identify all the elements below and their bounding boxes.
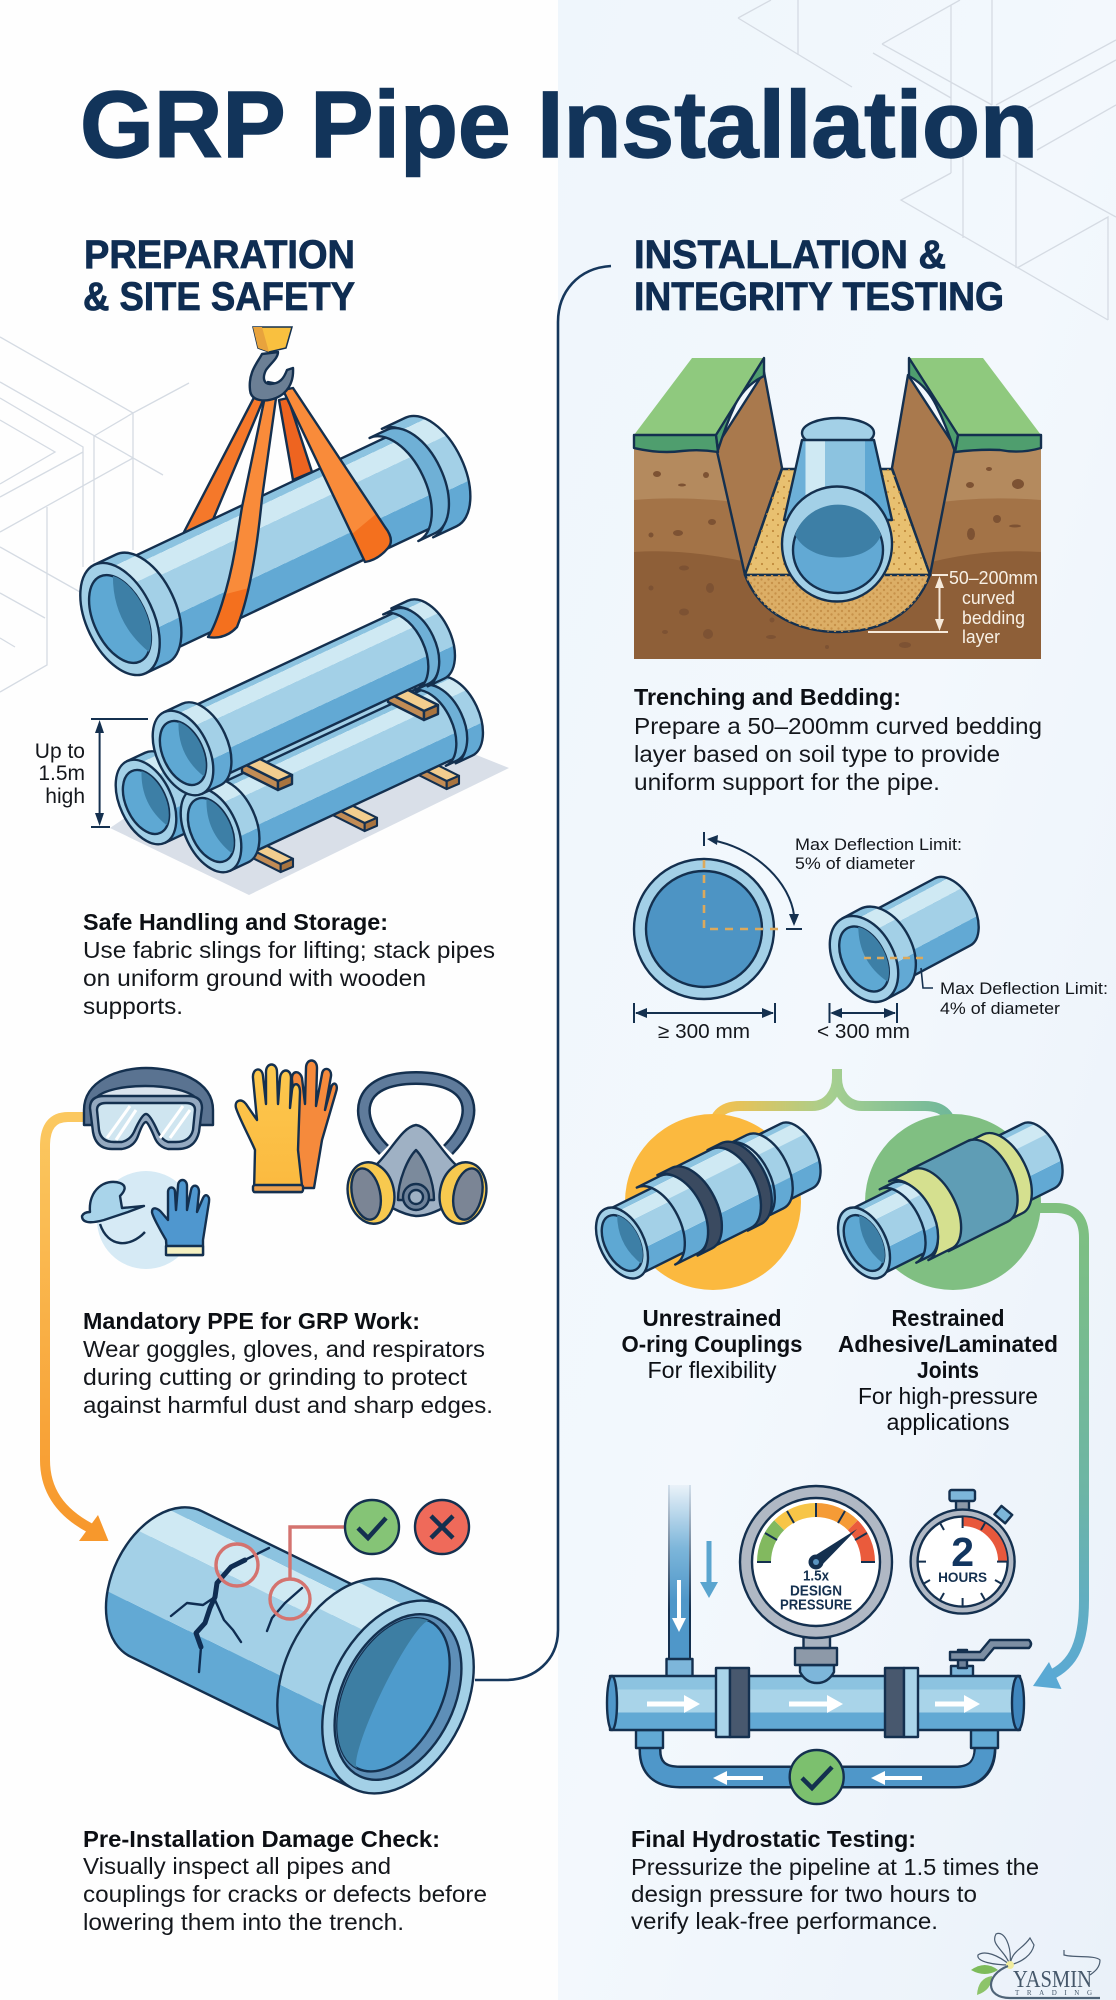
text: pre-installation damage check: Pre-Installation Damage Check: <box>83 1826 440 1852</box>
illustration: trench cross-section with bedding <box>634 358 1041 659</box>
background: left panel <box>0 0 558 2000</box>
height dimension: up to 1.5m high: high <box>45 785 85 808</box>
text: final hydrostatic testing: Pressurize the pipeline at 1.5 times the <box>631 1854 1039 1880</box>
icon: green check <box>345 1500 399 1554</box>
main pipe <box>607 1668 1024 1737</box>
soil specks <box>648 467 1024 649</box>
heading: preparation and site safety: & SITE SAFETY <box>83 275 355 319</box>
bedding depth dimension: bedding <box>962 608 1025 628</box>
bedding depth dimension <box>868 568 1038 647</box>
height dimension: up to 1.5m high: 1.5m <box>38 762 85 785</box>
height dimension: up to 1.5m high: Up to <box>35 740 85 763</box>
text: restrained adhesive laminated joints: Joints <box>917 1357 979 1383</box>
text: restrained adhesive laminated joints <box>838 1305 1058 1435</box>
text: pre-installation damage check: couplings for cracks or defects before <box>83 1881 487 1907</box>
text: trenching and bedding: uniform support for the pipe. <box>634 769 940 795</box>
bedding layer <box>745 469 930 575</box>
text: unrestrained O-ring couplings: O-ring Couplings <box>622 1331 802 1357</box>
title: GRP Pipe Installation <box>80 72 1038 178</box>
text: pre-installation damage check <box>83 1826 487 1935</box>
logo: Yasmin Trading: YASMIN <box>1013 1967 1092 1993</box>
text: final hydrostatic testing: Final Hydrostatic Testing: <box>631 1826 916 1852</box>
flow arrows <box>647 1695 980 1785</box>
text: restrained adhesive laminated joints: For high-pressure <box>858 1383 1038 1409</box>
icon: half-face respirator <box>342 1078 492 1228</box>
icon: pipe stack on wooden supports <box>103 588 509 895</box>
icon: red cross <box>415 1500 469 1554</box>
icon: safety goggles <box>84 1068 213 1149</box>
heading: preparation and site safety: PREPARATION <box>84 233 355 277</box>
text: final hydrostatic testing <box>631 1826 1039 1934</box>
text: pre-installation damage check: Visually inspect all pipes and <box>83 1853 391 1879</box>
text: final hydrostatic testing: verify leak-free performance. <box>631 1908 938 1934</box>
heading: installation and integrity testing: INSTALLATION & <box>634 233 946 277</box>
icon: pass check on loop <box>790 1750 844 1804</box>
background: right panel <box>558 0 1116 2000</box>
arrow: bracket to coupling types <box>712 1069 953 1136</box>
text: unrestrained O-ring couplings: Unrestrained <box>642 1305 782 1331</box>
bedding depth dimension: curved <box>962 588 1015 608</box>
text: safe handling and storage: supports. <box>83 993 183 1019</box>
icon: lifted pipe with crane hook and slings <box>64 327 486 688</box>
text: safe handling and storage: on uniform ground with wooden <box>83 965 426 991</box>
heading: preparation and site safety <box>83 233 355 319</box>
cracks <box>171 1548 302 1672</box>
arrow: navy connector between columns <box>475 266 611 1680</box>
diagram: large pipe deflection limit: 5% of diameter <box>795 854 915 873</box>
icon: hard hat and blue glove <box>82 1171 209 1269</box>
text: mandatory PPE: during cutting or grinding to protect <box>83 1364 468 1390</box>
text: pre-installation damage check: lowering them into the trench. <box>83 1909 404 1935</box>
logo: Yasmin Trading <box>971 1933 1100 1998</box>
bedding depth dimension: 50–200mm <box>949 568 1038 588</box>
pressure gauge <box>740 1486 892 1683</box>
pressure gauge: 1.5x <box>803 1568 830 1584</box>
heading: installation and integrity testing: INTEGRITY TESTING <box>634 275 1004 319</box>
text: mandatory PPE <box>83 1308 493 1418</box>
stopwatch: 2 hours <box>911 1490 1015 1614</box>
inspection circles and leader <box>216 1527 345 1619</box>
diagram: small pipe deflection limit: 4% of diameter <box>940 999 1060 1018</box>
height dimension: up to 1.5m high <box>35 719 148 827</box>
icon: O-ring coupling <box>582 1107 834 1293</box>
text: mandatory PPE: Wear goggles, gloves, and respirators <box>83 1336 485 1362</box>
text: restrained adhesive laminated joints: Restrained <box>892 1305 1004 1331</box>
valve <box>950 1640 1031 1668</box>
text: safe handling and storage: Safe Handling and Storage: <box>83 909 388 935</box>
arrow: orange connector from PPE to damage check <box>45 1117 108 1541</box>
arrow: green-blue connector to hydrostatic test <box>1030 1208 1084 1689</box>
diagram: large pipe deflection limit: Max Deflection Limit: <box>795 835 962 854</box>
bedding depth dimension: layer <box>962 627 1000 647</box>
return loop <box>636 1730 998 1777</box>
diagram: large pipe deflection limit: ≥ 300 mm <box>658 1021 750 1043</box>
text: restrained adhesive laminated joints: applications <box>886 1409 1010 1435</box>
water riser <box>669 1485 690 1661</box>
icon: adhesive laminated joint <box>824 1107 1076 1293</box>
trench walls <box>716 372 782 575</box>
text: mandatory PPE: against harmful dust and sharp edges. <box>83 1392 493 1418</box>
text: restrained adhesive laminated joints: Adhesive/Laminated <box>838 1331 1058 1357</box>
diagram: small pipe deflection limit <box>816 861 1108 1043</box>
text: unrestrained O-ring couplings <box>622 1305 802 1383</box>
icon: rubber gloves <box>236 1060 337 1192</box>
pressure gauge: PRESSURE <box>780 1596 852 1614</box>
text: safe handling and storage: Use fabric slings for lifting; stack pipes <box>83 937 495 963</box>
text: trenching and bedding: Prepare a 50–200mm curved bedding <box>634 713 1042 739</box>
text: mandatory PPE: Mandatory PPE for GRP Work: <box>83 1308 420 1334</box>
heading: installation and integrity testing <box>634 233 1004 319</box>
diagram: large pipe deflection limit <box>634 832 962 1043</box>
stopwatch: 2 hours: HOURS <box>938 1569 987 1585</box>
text: safe handling and storage <box>83 909 495 1019</box>
icon: damaged pipe inspection <box>73 1469 504 1818</box>
diagram: small pipe deflection limit: < 300 mm <box>817 1021 910 1043</box>
text: final hydrostatic testing: design pressure for two hours to <box>631 1881 977 1907</box>
diagram: small pipe deflection limit: Max Deflection Limit: <box>940 979 1108 998</box>
stopwatch: 2 hours: 2 <box>951 1529 974 1575</box>
illustration: hydrostatic test rig <box>607 1485 1031 1804</box>
text: trenching and bedding: Trenching and Bedding: <box>634 684 901 710</box>
text: unrestrained O-ring couplings: For flexibility <box>648 1357 777 1383</box>
text: trenching and bedding: layer based on soil type to provide <box>634 741 1000 767</box>
pipe in trench <box>802 418 874 448</box>
text: trenching and bedding <box>634 684 1042 795</box>
logo: Yasmin Trading: TRADING <box>1015 1989 1092 1997</box>
grass <box>634 358 764 435</box>
arrow: water flow down <box>700 1541 718 1598</box>
pressure gauge: DESIGN <box>790 1582 842 1600</box>
